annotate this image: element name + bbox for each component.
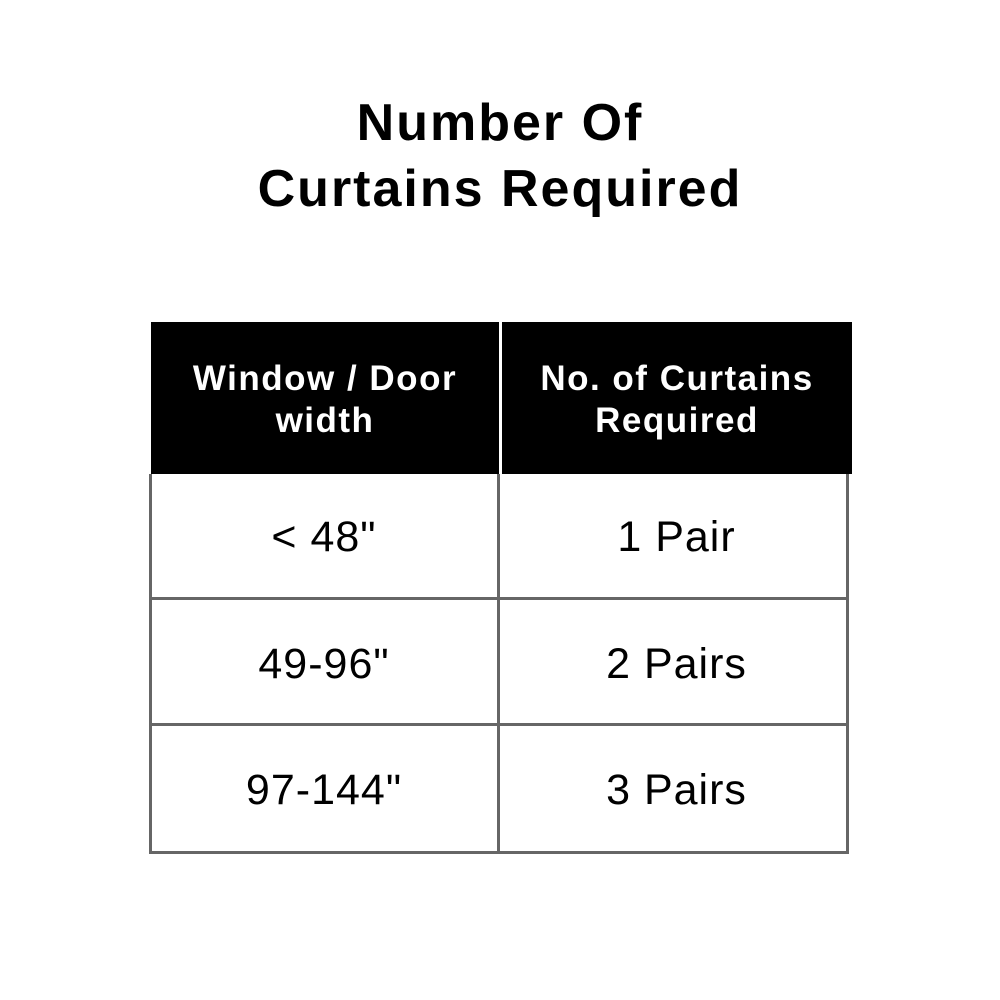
row 1: < 48" [271, 513, 377, 561]
header cell: width: Window / Door [193, 359, 457, 398]
row 1 [271, 513, 736, 561]
title: Curtains Required [258, 160, 742, 218]
title: Number Of [357, 94, 643, 152]
header cell: width: width [276, 401, 374, 440]
header cell: curtains [502, 322, 852, 474]
row 3: 3 Pairs [606, 766, 747, 814]
row 3: 97-144" [246, 766, 402, 814]
row 2: 2 Pairs [606, 640, 747, 688]
header cell: curtains: Required [595, 401, 759, 440]
row 2: 49-96" [258, 640, 390, 688]
row 1: 1 Pair [617, 513, 736, 561]
row 2 [258, 640, 747, 688]
table [149, 322, 852, 854]
header cell: curtains: No. of Curtains [540, 359, 814, 398]
row 3 [246, 766, 747, 814]
title [258, 94, 742, 218]
header cell: width [151, 322, 499, 474]
